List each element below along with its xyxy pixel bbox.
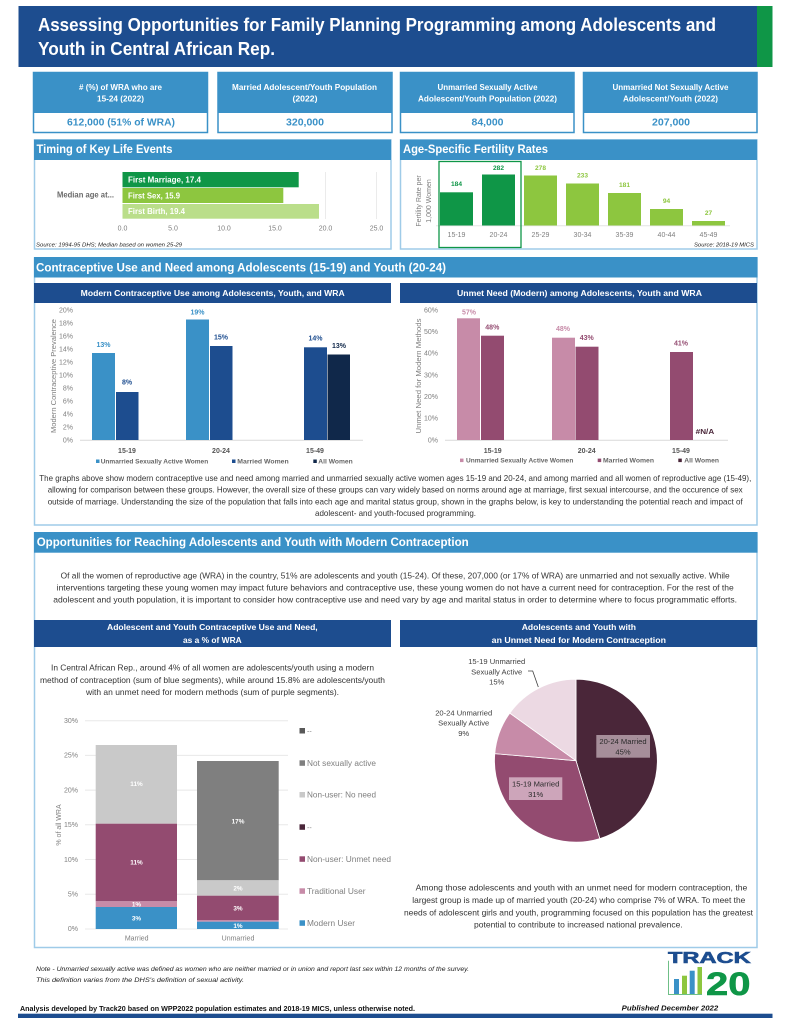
chart: unmet need: 20% [424,394,438,401]
chart: modern contraceptive use: 20-24 [212,448,230,455]
stat card: unmarried sexually active: Adolescent/Youth Population (2022) [418,95,557,104]
stacked bar chart: percent of all WRA: 2% [233,886,243,892]
chart: modern contraceptive use [34,283,391,465]
chart: unmet need: 15-49 [672,448,690,455]
chart: modern contraceptive use: 10% [59,372,73,380]
stat card: married population: 320,000 [286,118,324,128]
chart: unmet need: 41% [674,340,689,347]
bar chart: fertility rate by age: 184 [451,181,462,188]
sub-panel heading: unmet need group: an Unmet Need for Modern Contraception [492,635,666,645]
bar chart: median age at life events: First Marriage, 17.4 [128,176,202,185]
chart: unmet need: Unmet Need (Modern) among Adolescents, Youth and WRA [457,288,702,298]
footnote: definition note: This definition varies from the DHS's definition of sexual activity. [36,977,244,984]
chart: unmet need: 20-24 [578,448,596,455]
chart: modern contraceptive use: 19% [190,310,205,317]
bar chart: fertility rate by age: 27 [705,210,712,217]
bar chart: fertility rate by age [416,165,730,239]
chart: modern contraceptive use: 12% [59,360,73,366]
stat card: unmarried sexually active: Unmarried Sexually Active [438,83,538,92]
pie chart: unmet need by group: 15-19 Married [512,780,559,789]
text block: unmet need summary [404,884,754,929]
chart: modern contraceptive use: 13% [96,342,111,349]
pie chart: unmet need by group: 9% [458,729,469,738]
chart: modern contraceptive use: 2% [63,424,73,432]
pie chart: unmet need by group: Sexually Active [438,719,489,728]
heading: contraceptive use and need: Contraceptive Use and Need among Adolescents (15-19) and Youth (20-24) [36,260,446,274]
bar chart: fertility rate by age: 25-29 [532,232,550,239]
footnote: definition note: Note - Unmarried sexually active was defined as women who are neither married or in union and report last sex within 12 months of the survey. [36,966,469,973]
text block: unmet need summary: potential to contribute to increased national prevalence. [474,920,683,929]
stacked bar chart: percent of all WRA: 10% [64,857,78,864]
chart: modern contraceptive use: 15-49 [306,448,324,455]
chart: modern contraceptive use: 18% [59,320,73,328]
pie chart: unmet need by group: 15-19 Unmarried [468,657,525,666]
stat card: WRA 15-24: 15-24 (2022) [97,95,144,104]
stacked bar chart: percent of all WRA: 3% [132,916,141,922]
chart legend: stacked bar: Non-user: No need [307,791,376,800]
stat card: married population [218,72,392,132]
bar chart: fertility rate by age: 20-24 [490,232,508,239]
pie chart: unmet need by group: 31% [528,790,544,799]
stacked bar chart: percent of all WRA: 30% [64,718,78,725]
chart: modern contraceptive use: 4% [63,412,73,418]
stat card: WRA 15-24 [34,72,208,132]
bar chart: fertility rate by age: 15-19 [448,232,466,239]
logo: Track20: TRACK [668,950,752,967]
logo: Track20: 20 [706,966,750,1002]
stacked bar chart: percent of all WRA: 5% [68,892,78,898]
pie chart: unmet need by group: Sexually Active [471,667,522,676]
bar chart: fertility rate by age: 45-49 [700,232,718,239]
stat card: unmarried not sexually active [584,72,757,132]
chart: modern contraceptive use: 20% [59,308,73,314]
stacked bar chart: percent of all WRA: 11% [130,860,143,866]
text block: use and need summary [40,664,385,697]
text block: use and need summary: In Central African Rep., around 4% of all women are adolescents/youth using a modern [51,664,374,673]
highlight box: ages 15-24 [439,162,521,248]
chart: unmet need: 10% [424,416,438,423]
chart: modern contraceptive use: 13% [332,343,347,350]
text block: graph explanation: adolescent- and youth-focused programming. [315,509,476,518]
chart: modern contraceptive use: Unmarried Sexually Active Women [101,458,208,465]
chart legend: stacked bar: Traditional User [307,887,366,896]
chart legend: stacked bar: -- [307,825,312,832]
text block: graph explanation: outside of marriage. Understanding the size of the population that falls into each age and marital status group, shown in the graphs below, is key to understanding the potential reach and impact of [48,497,743,506]
text block: opportunities intro: Of all the women of reproductive age (WRA) in the country, 51% are adolescents and youth (15-24). Of these, 207,000 (or 17% of WRA) are unmarried and not sexually active. While [61,572,730,581]
title banner: Youth in Central African Rep. [38,39,275,59]
chart legend: stacked bar: -- [307,728,312,736]
chart: unmet need: All Women [684,457,719,464]
chart: unmet need: Married Women [603,457,654,464]
logo: Track20 [668,950,752,1002]
chart: unmet need: 15-19 [484,448,502,455]
text block: graph explanation [39,474,751,518]
bar chart: fertility rate by age: 94 [663,198,670,205]
stat card: unmarried not sexually active: Adolescent/Youth (2022) [623,95,718,104]
chart: unmet need: 48% [485,324,500,331]
title banner: Assessing Opportunities for Family Planning Programming among Adolescents and [38,15,716,35]
source note: timing: Source: 1994-95 DHS; Median based on women 25-29 [36,243,183,249]
stacked bar chart: percent of all WRA: Married [125,936,149,943]
pie chart: unmet need by group: 20-24 Unmarried [435,709,492,718]
chart: unmet need: 43% [580,335,594,342]
heading: age-specific fertility rates: Age-Specific Fertility Rates [403,142,548,156]
text block: opportunities intro: interventions targeting these young women may impact future behaviors and contraceptive use, these young women do not have a current need for contraception. For the rest of the [57,584,734,593]
footer: publication date: Published December 2022 [622,1004,718,1012]
title banner [18,6,772,67]
bar chart: median age at life events: 5.0 [168,225,178,232]
chart legend: stacked bar: Modern User [307,919,355,928]
chart: unmet need: Unmarried Sexually Active Women [466,457,573,464]
bar chart: median age at life events: First Birth, 19.4 [128,207,186,216]
chart: modern contraceptive use: 15-19 [118,448,136,455]
bar chart: fertility rate by age: 30-34 [574,232,592,239]
bar chart: fertility rate by age: 35-39 [616,232,634,239]
text block: graph explanation: allowing for comparison between these groups. However, the overall size of these groups can vary widely based on norms around age at marriage, first sexual intercourse, and the occurence of sex [48,486,743,495]
stacked bar chart: percent of all WRA: 1% [233,923,243,930]
chart: modern contraceptive use: 14% [308,336,323,343]
stat card: unmarried not sexually active: Unmarried Not Sexually Active [612,83,729,92]
bar chart: fertility rate by age: 181 [619,182,630,189]
bar chart: fertility rate by age: 278 [535,165,546,172]
bar chart: median age at life events: 25.0 [370,225,383,232]
text block: graph explanation: The graphs above show modern contraceptive use and need among married and unmarried sexually active women ages 15-19 and 20-24, and among married and all women of reproductive age (15-49), [39,474,751,483]
chart: unmet need: 48% [556,326,571,333]
stacked bar chart: percent of all WRA: 25% [64,753,78,760]
stat card: unmarried sexually active: 84,000 [472,118,504,128]
stacked bar chart: percent of all WRA [56,718,288,943]
chart: modern contraceptive use: Married Women [237,458,289,465]
panel: contraceptive use and need [34,257,758,525]
chart: unmet need: 57% [462,310,477,317]
stacked bar chart: percent of all WRA: 11% [130,781,143,788]
chart: unmet need: #N/A [696,429,714,436]
chart: unmet need: 40% [424,351,438,358]
bar chart: median age at life events [57,172,383,232]
text block: use and need summary: with an unmet need for modern methods (sum of purple segments). [85,688,339,697]
text block: unmet need summary: Among those adolescents and youth with an unmet need for modern contraception, the [416,884,748,893]
pie chart: unmet need by group: 15% [489,678,505,686]
bar chart: fertility rate by age: 1,000 Women [426,179,433,223]
sub-panel heading: unmet need group: Adolescents and Youth with [522,622,636,632]
bar chart: fertility rate by age: 233 [577,172,588,180]
text block: opportunities intro [53,572,737,605]
chart: modern contraceptive use: 0% [63,438,73,444]
chart legend: stacked bar: Non-user: Unmet need [307,855,391,864]
footer: attribution: Analysis developed by Track20 based on WPP2022 population estimates and 2018-19 MICS, unless otherwise noted. [20,1004,415,1013]
pie chart: unmet need by group: 20-24 Married [599,737,647,746]
stacked bar chart: percent of all WRA: 20% [64,787,78,794]
bar chart: fertility rate by age: 282 [493,165,504,172]
stacked bar chart: percent of all WRA: 17% [232,818,245,826]
bar chart: median age at life events: 20.0 [319,225,332,232]
stacked bar chart: percent of all WRA: 3% [233,906,243,912]
footer rule [18,1014,772,1018]
text block: opportunities intro: adolescent and youth population, it is important to consider how contraceptive use and need vary by age and marital status in order to determine where to focus programmatic efforts. [53,596,737,605]
bar chart: fertility rate by age: Fertility Rate per [416,175,423,227]
chart: unmet need: 0% [428,438,438,444]
chart: modern contraceptive use: Modern Contraceptive Use among Adolescents, Youth, and WRA [81,288,345,298]
panel: age-specific fertility rates [400,140,757,249]
text block: unmet need summary: largest group is made up of married youth (20-24) who comprise 7% of WRA. To meet the [412,896,746,905]
bar chart: median age at life events: 0.0 [118,225,127,232]
pie chart: unmet need by group [435,657,657,842]
stacked bar chart: percent of all WRA: 15% [64,822,78,829]
stacked bar chart: percent of all WRA: 1% [132,902,141,908]
chart legend: stacked bar: Not sexually active [307,759,377,768]
stat card: WRA 15-24: # (%) of WRA who are [79,83,163,92]
stat card: WRA 15-24: 612,000 (51% of WRA) [67,118,175,128]
chart: unmet need: 60% [424,308,438,314]
chart: unmet need [400,283,757,464]
panel: opportunities for reaching adolescents and youth [34,532,758,948]
chart: modern contraceptive use: 8% [63,386,73,392]
stacked bar chart: percent of all WRA: Unmarried [222,936,254,943]
chart: modern contraceptive use: 15% [214,335,229,342]
chart: unmet need: 30% [424,372,438,380]
stacked bar chart: percent of all WRA: 0% [68,926,78,933]
pie chart: unmet need by group: 45% [615,747,631,756]
bar chart: median age at life events: First Sex, 15.9 [128,191,181,200]
text block: unmet need summary: needs of adolescent girls and youth, programming focused on this population has the greatest [404,908,754,917]
heading: timing of key life events: Timing of Key Life Events [36,142,173,156]
chart: modern contraceptive use: All Women [318,458,353,465]
chart: modern contraceptive use: 14% [59,346,73,354]
text block: use and need summary: method of contraception (sum of blue segments), while around 15.8% are adolescents/youth [40,676,385,685]
chart: unmet need: 50% [424,329,438,336]
stat card: married population: Married Adolescent/Youth Population [232,83,377,92]
source note: fertility: Source: 2018-19 MICS [694,243,754,249]
chart: modern contraceptive use: 8% [122,380,133,387]
bar chart: fertility rate by age: 40-44 [658,232,676,239]
panel: timing of key life events [34,140,391,249]
bar chart: median age at life events: 10.0 [217,225,231,232]
bar chart: median age at life events: 15.0 [268,225,282,232]
sub-panel heading: use and need as a percent of WRA: Adolescent and Youth Contraceptive Use and Need, [107,622,318,632]
chart legend: stacked bar [300,728,391,928]
chart: modern contraceptive use: 16% [59,334,73,340]
heading: opportunities: Opportunities for Reaching Adolescents and Youth with Modern Contraception [37,535,469,549]
sub-panel heading: use and need as a percent of WRA [34,620,391,647]
stat card: married population: (2022) [292,95,318,104]
chart: unmet need: Unmet Need for Modern Methods [416,318,423,434]
stat card: unmarried not sexually active: 207,000 [652,118,690,128]
chart: modern contraceptive use: Modern Contraceptive Prevalence [51,319,58,433]
footnote: definition note [36,966,469,984]
stat card: unmarried sexually active [400,72,574,132]
sub-panel heading: unmet need group [400,620,757,647]
sub-panel heading: use and need as a percent of WRA: as a % of WRA [183,635,242,645]
stacked bar chart: percent of all WRA: % of all WRA [56,804,63,846]
bar chart: median age at life events: Median age at... [57,191,114,200]
chart: modern contraceptive use: 6% [63,398,73,406]
